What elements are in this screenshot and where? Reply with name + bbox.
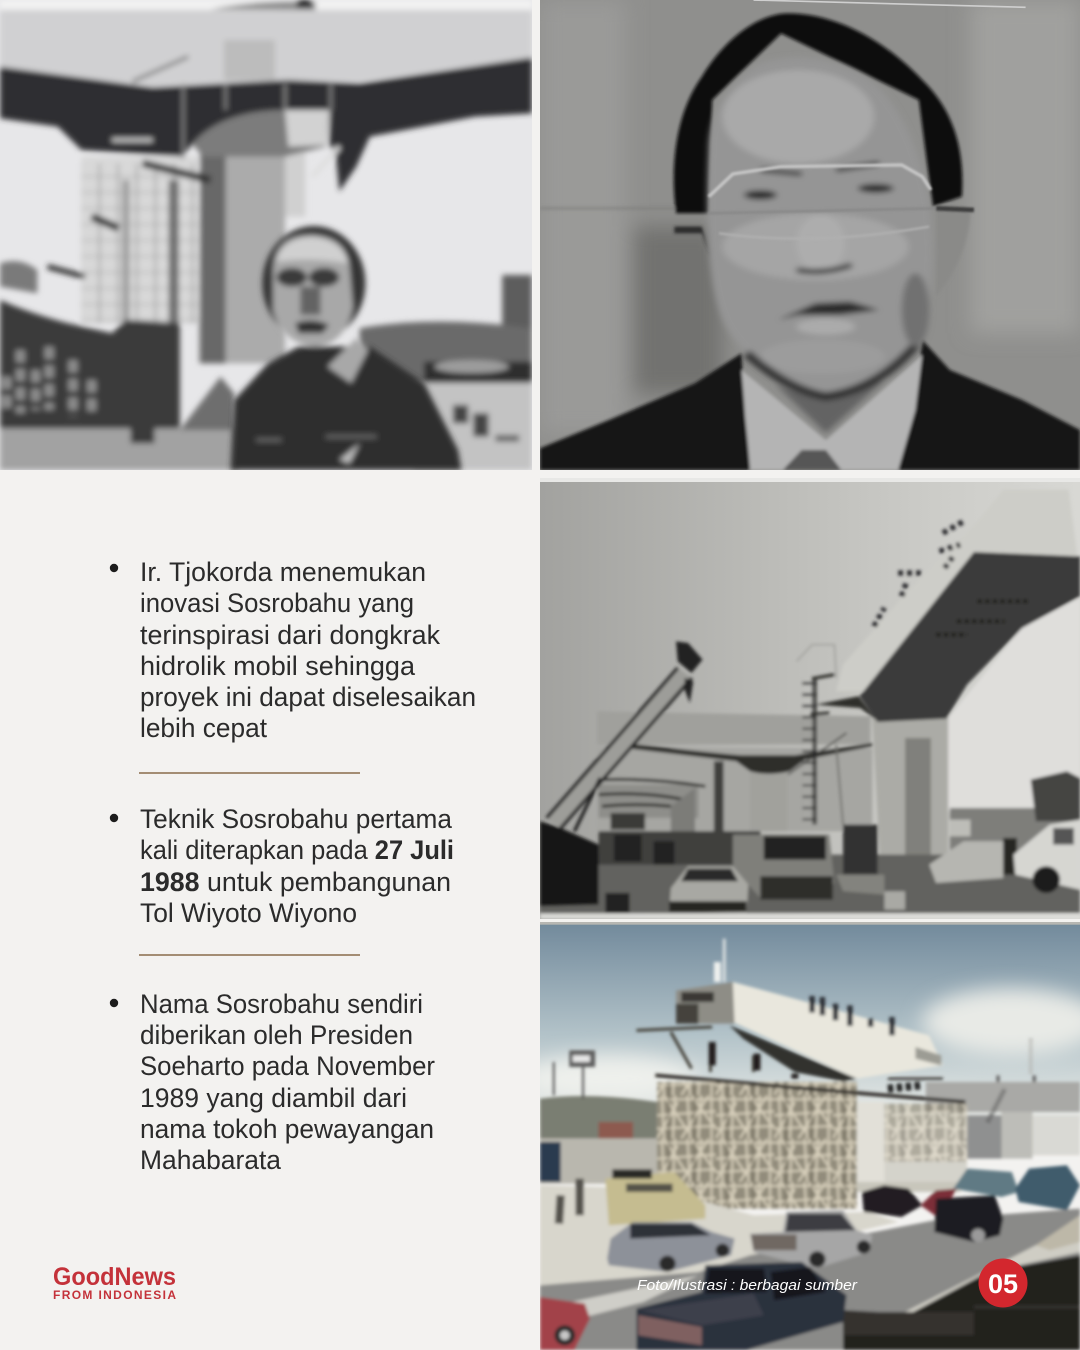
- eyes: [744, 190, 777, 200]
- pickup: [929, 841, 1003, 883]
- neck shadow: [774, 380, 884, 433]
- foreground pickup: [636, 1262, 847, 1350]
- ground: [540, 855, 1080, 913]
- body text list: [110, 557, 476, 1175]
- bus: [733, 835, 834, 898]
- background bridge: [926, 1082, 1080, 1112]
- eyebrows: [760, 163, 879, 174]
- main deck face: [836, 490, 1077, 691]
- yellow truck: [605, 1172, 705, 1225]
- red car: [540, 1297, 590, 1350]
- workers under beam: [712, 1042, 795, 1079]
- bullet item 2: kali diterapkan pada 27 Juli: [140, 835, 454, 865]
- cantilever beam: [733, 982, 943, 1079]
- photo credit caption: Foto/Ilustrasi : berbagai sumber: [637, 1277, 858, 1294]
- bullet item 1: proyek ini dapat diselesaikan: [140, 682, 476, 712]
- bullet item 3: Nama Sosrobahu sendiri: [140, 989, 423, 1019]
- mid pier column: [750, 771, 787, 831]
- platform beams: [655, 1075, 965, 1102]
- horizon: [540, 1096, 657, 1139]
- white truck: [1014, 820, 1080, 890]
- mouth: [778, 302, 879, 320]
- mast and figure: [720, 939, 728, 982]
- mid pier T beam: [624, 743, 872, 774]
- bullet item 3: 1989 yang diambil dari: [140, 1083, 407, 1113]
- small object on ground: [605, 893, 630, 913]
- scaffold left of pier: [81, 157, 198, 323]
- scaffolding: [657, 1082, 857, 1209]
- background vehicles and tree: [950, 808, 1080, 855]
- crane boom: [547, 668, 692, 828]
- tie: [783, 450, 841, 470]
- deck underside: [860, 552, 1080, 722]
- bullet item 2: Teknik Sosrobahu pertama: [140, 804, 453, 834]
- shirt collar: [741, 355, 922, 470]
- eyeglasses: [709, 165, 974, 239]
- distant cars: [953, 1169, 1019, 1197]
- bullet item 1: hidrolik mobil sehingga: [140, 651, 416, 681]
- ladder tower: [802, 678, 817, 825]
- workers at left: [559, 1179, 580, 1224]
- bullet item 2: Tol Wiyoto Wiyono: [140, 898, 357, 928]
- bullet item 2: [110, 804, 454, 928]
- nose: [808, 260, 835, 265]
- logo: GoodNews from Indonesia: FROM INDONESIA: [53, 1288, 176, 1302]
- bullet item 3: Soeharto pada November: [140, 1051, 435, 1081]
- crane base: [540, 821, 599, 906]
- bullet item 1: [110, 557, 476, 743]
- photo: pier with scaffolding and traffic in colour: [519, 922, 1080, 1350]
- right background: [502, 275, 532, 335]
- man in dark shirt: [231, 226, 461, 470]
- bullet item 3: Mahabarata: [140, 1145, 282, 1175]
- upper scaffold poles: [636, 1027, 754, 1072]
- bullet item 1: Ir. Tjokorda menemukan: [140, 557, 426, 587]
- logo: GoodNews from Indonesia: [53, 1263, 176, 1302]
- silver pickup: [750, 1210, 872, 1269]
- sidewalk and road: [540, 1185, 898, 1285]
- suit: [540, 353, 751, 470]
- sedan: [669, 866, 748, 913]
- photo: portrait of Ir. Tjokorda: [540, 0, 1080, 470]
- workers on deck: [812, 996, 892, 1035]
- hair: [674, 13, 962, 213]
- pier head: [188, 110, 331, 157]
- photo: engineer in front of pier: [0, 0, 532, 470]
- beam underside: [729, 1025, 857, 1081]
- photo: Sosrobahu pier construction black and white: [540, 478, 1080, 919]
- page number badge: [978, 1258, 1028, 1308]
- bullet item 1: inovasi Sosrobahu yang: [140, 588, 414, 618]
- right ear: [936, 206, 970, 297]
- bracket arm: [816, 696, 876, 720]
- workers: [874, 521, 964, 626]
- page number badge: 05: [988, 1269, 1018, 1299]
- bullet item 1: terinspirasi dari dongkrak: [140, 620, 440, 650]
- roadside sign: [569, 1050, 595, 1067]
- face: [708, 58, 933, 400]
- bullet item 3: nama tokoh pewayangan: [140, 1114, 434, 1144]
- bullet item 3: diberikan oleh Presiden: [140, 1020, 413, 1050]
- dark foreground wall: [843, 1255, 1080, 1350]
- pier column: [198, 150, 285, 363]
- silver sedan: [607, 1222, 735, 1272]
- bullet item 3: [110, 989, 435, 1175]
- logo: GoodNews from Indonesia: GoodNews: [53, 1263, 176, 1291]
- rear pier deck: [597, 711, 871, 745]
- bullet item 2: 1988 untuk pembangunan: [140, 867, 451, 897]
- sky right of pillar: [948, 598, 1080, 811]
- left lower dark mass: [0, 261, 37, 293]
- bullet item 1: lebih cepat: [140, 713, 267, 743]
- deck underside: [0, 57, 532, 192]
- main pillar: [872, 717, 950, 856]
